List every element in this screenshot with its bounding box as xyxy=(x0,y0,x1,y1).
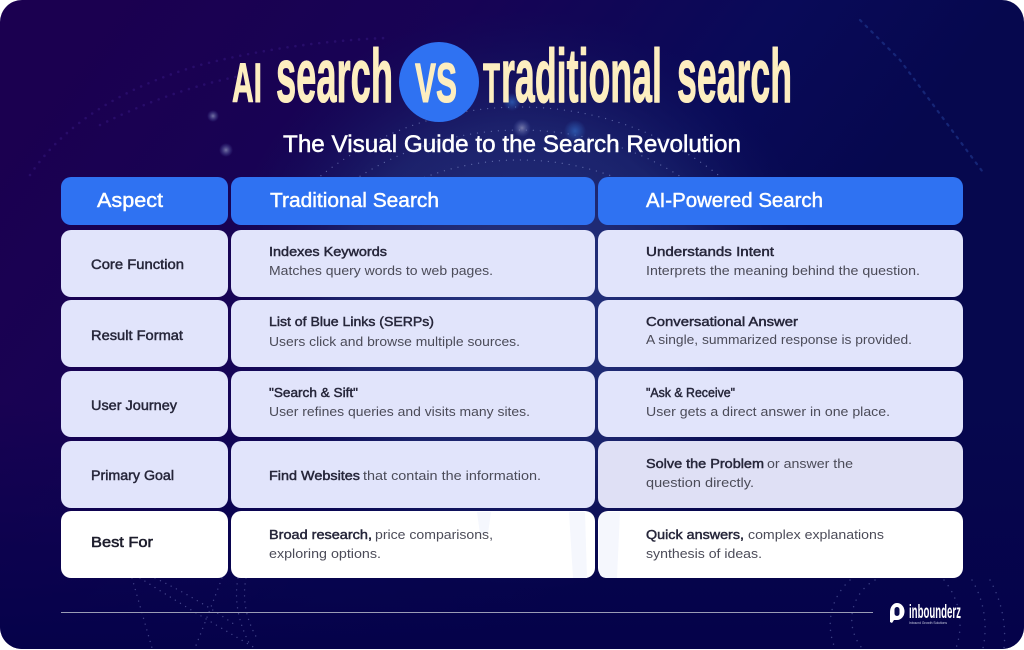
traditional cell: Indexes Keywords xyxy=(269,244,388,259)
title xyxy=(232,34,792,122)
aspect cell xyxy=(61,300,228,367)
subtitle: The Visual Guide to the Search Revolution xyxy=(283,131,741,158)
AI cell: complex explanations xyxy=(748,527,885,542)
traditional cell xyxy=(231,441,595,508)
icon: VS badge xyxy=(399,42,479,122)
traditional cell: price comparisons, xyxy=(375,527,493,542)
AI cell: Conversational Answer xyxy=(646,314,799,329)
aspect cell xyxy=(61,441,228,508)
icon: logo mark xyxy=(890,603,905,623)
traditional cell: Find Websites xyxy=(269,468,361,483)
traditional cell xyxy=(231,371,595,437)
aspect cell xyxy=(61,511,228,578)
header: Aspect xyxy=(61,177,228,225)
aspect cell: Primary Goal xyxy=(91,468,174,483)
traditional cell xyxy=(231,300,595,367)
AI cell xyxy=(598,230,963,297)
text: search xyxy=(677,34,792,119)
AI cell xyxy=(598,371,963,437)
header: AI-Powered Search xyxy=(598,177,963,225)
logo: inbounderz xyxy=(890,602,961,625)
AI cell xyxy=(598,300,963,367)
title: Traditional search: raditional xyxy=(501,34,662,119)
traditional cell: exploring options. xyxy=(269,546,381,561)
traditional cell: Matches query words to web pages. xyxy=(269,263,493,278)
traditional cell: User refines queries and visits many sites. xyxy=(269,404,530,419)
AI cell: question directly. xyxy=(646,475,754,490)
table header xyxy=(61,177,963,225)
AI cell: A single, summarized response is provided. xyxy=(646,332,912,347)
AI cell: Interprets the meaning behind the question. xyxy=(646,263,920,278)
AI cell xyxy=(598,511,963,578)
traditional cell: Broad research, xyxy=(269,527,372,542)
AI cell: User gets a direct answer in one place. xyxy=(646,404,890,419)
AI cell xyxy=(598,441,963,508)
aspect cell xyxy=(61,230,228,297)
title: AI search: AI xyxy=(232,51,262,114)
traditional cell xyxy=(231,511,595,578)
logo tagline: Inbound Growth Solutions xyxy=(909,620,947,625)
header: Traditional Search: Traditional Search xyxy=(270,190,439,212)
row: Best For xyxy=(61,511,963,578)
icon: VS badge: VS xyxy=(415,51,457,114)
aspect cell: User Journey xyxy=(91,398,177,413)
table: comparison xyxy=(61,177,963,578)
traditional cell: that contain the information. xyxy=(363,468,541,483)
AI cell: synthesis of ideas. xyxy=(646,546,762,561)
traditional cell: "Search & Sift" xyxy=(269,385,358,400)
aspect cell: Best For xyxy=(91,534,153,551)
row: User Journey xyxy=(61,371,963,437)
AI cell: Quick answers, xyxy=(646,527,744,542)
header: Aspect: Aspect xyxy=(97,190,163,212)
aspect cell: Core Function xyxy=(91,257,184,272)
AI cell: Understands Intent xyxy=(646,244,774,259)
traditional cell: List of Blue Links (SERPs) xyxy=(269,314,434,329)
traditional cell: Users click and browse multiple sources. xyxy=(269,334,520,349)
title: AI search xyxy=(232,34,393,119)
header: AI-Powered Search: AI-Powered Search xyxy=(646,190,823,212)
header: Traditional Search xyxy=(231,177,595,225)
title: Traditional search: T xyxy=(483,51,500,114)
AI cell: or answer the xyxy=(767,456,853,471)
row: Core Function xyxy=(61,230,963,297)
footer rule xyxy=(61,612,873,613)
title: search xyxy=(276,34,393,119)
aspect cell xyxy=(61,371,228,437)
aspect cell: Result Format xyxy=(91,328,183,343)
logo wordmark: inbounderz xyxy=(909,602,961,623)
AI cell: "Ask & Receive" xyxy=(646,385,735,400)
row: Result Format xyxy=(61,300,963,367)
AI cell: Solve the Problem xyxy=(646,456,764,471)
row: Primary Goal xyxy=(61,441,963,508)
traditional cell xyxy=(231,230,595,297)
